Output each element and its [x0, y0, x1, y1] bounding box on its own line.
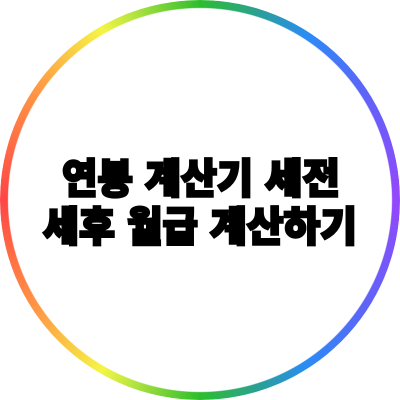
- title line 1: [62, 156, 340, 202]
- title line 2: [43, 204, 357, 250]
- title: [42, 156, 357, 247]
- title line 1: 연봉: [62, 156, 133, 202]
- title line 1: 세전: [265, 156, 340, 202]
- title line 1: 계산기: [145, 156, 253, 202]
